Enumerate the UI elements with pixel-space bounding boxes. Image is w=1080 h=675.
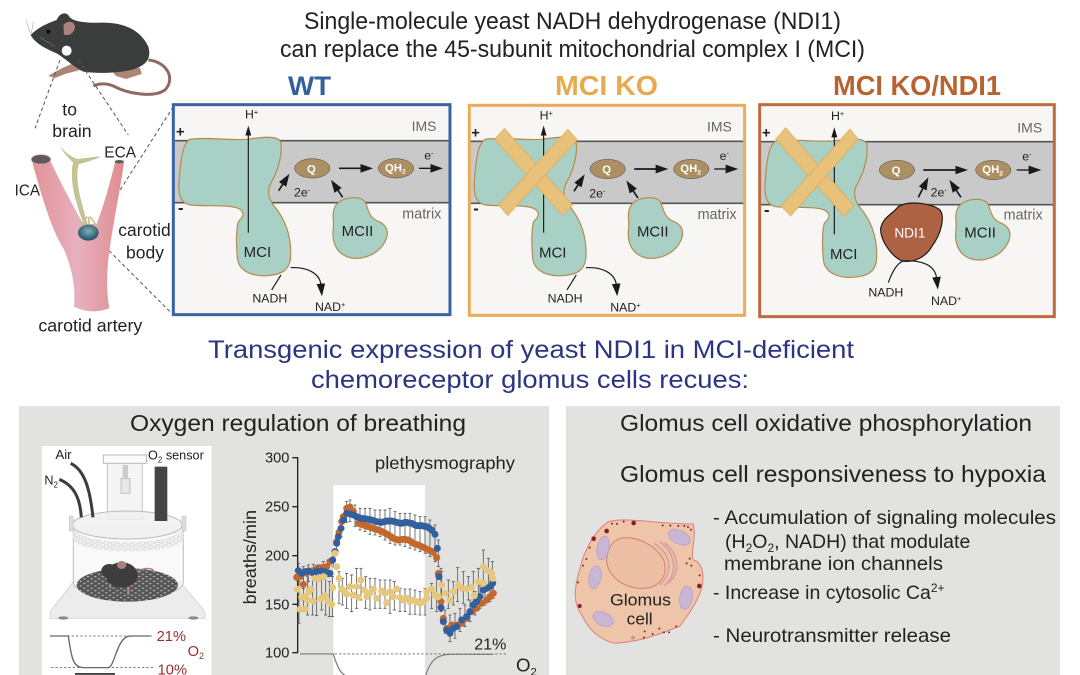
bullet list: membrane ion channels — [724, 553, 943, 575]
panel labels: NAD — [315, 300, 341, 314]
panel labels: + — [636, 300, 641, 309]
panel labels: e — [720, 149, 726, 163]
complex NDI1: NDI1 — [894, 225, 925, 240]
panel labels: 2e — [294, 186, 308, 200]
bullet list: , NADH) that modulate — [774, 531, 970, 553]
complex NDI1 — [881, 203, 942, 261]
oxygen levels: 21% — [157, 629, 186, 645]
panel labels: MCI — [830, 246, 857, 263]
apparatus labels: Air — [55, 447, 72, 462]
Q and QH2: 2 — [697, 169, 701, 176]
panel labels: + — [549, 108, 553, 117]
panel: MCI KO/NDI1 — [760, 105, 1054, 317]
cross over MCI — [495, 128, 577, 216]
anatomy labels: ICA — [15, 183, 41, 200]
anatomy labels — [15, 99, 171, 335]
icon: glomus cell: cell — [627, 609, 653, 628]
bullet list: 2 — [746, 541, 753, 555]
Q and QH2 — [295, 159, 414, 178]
panel labels: - — [764, 200, 770, 219]
chart labels: plethysmography — [375, 453, 515, 473]
apparatus labels: O — [148, 449, 158, 463]
axis: 150 — [265, 597, 289, 613]
panel labels: H — [245, 108, 254, 122]
panel labels: NAD — [610, 300, 636, 314]
oxygen levels: O — [188, 644, 199, 660]
Q and QH2: QH — [982, 164, 999, 176]
Q and QH2 — [590, 159, 709, 179]
Q and QH2: Q — [602, 164, 611, 176]
panel labels: IMS — [412, 118, 437, 134]
anatomy labels: to — [62, 99, 77, 119]
panel labels: matrix — [1004, 208, 1043, 224]
panel labels: - — [603, 186, 606, 195]
heading: WT: WT — [288, 71, 332, 101]
oxygen levels: 2 — [199, 651, 204, 661]
panel labels: NADH — [548, 292, 583, 306]
Q and QH2: 2 — [999, 170, 1003, 177]
heading: Oxygen regulation of breathing — [130, 410, 466, 436]
anatomy labels: body — [126, 242, 164, 262]
arrows — [544, 135, 727, 290]
heading: responsiveness to hypoxia: Glomus cell responsiveness to hypoxia — [620, 461, 1046, 487]
panel labels: 2e — [589, 186, 603, 200]
bullet list — [713, 507, 1056, 647]
axis: 250 — [265, 500, 289, 516]
cross over MCI — [776, 128, 858, 216]
panel labels: NADH — [252, 291, 287, 305]
illustration: mouse and carotid anatomy — [15, 13, 173, 335]
error bars — [298, 500, 493, 642]
title: Single-molecule yeast NADH dehydrogenase (NDI1) — [304, 8, 841, 35]
subtitle — [208, 336, 854, 394]
panel labels: MCII — [964, 224, 996, 241]
apparatus labels: 2 — [53, 480, 58, 489]
panel labels: + — [176, 125, 185, 141]
anatomy labels: ECA — [104, 144, 137, 161]
panel labels: + — [341, 300, 345, 309]
Q and QH2: 2 — [402, 169, 406, 176]
panel labels: - — [944, 186, 947, 195]
bullet list: 2 — [767, 541, 774, 555]
bullet list: - Accumulation of signaling molecules — [713, 507, 1056, 529]
icon: carotid artery — [31, 147, 124, 311]
axis: breaths/min — [240, 510, 260, 604]
panel labels: MCI — [539, 244, 566, 261]
icon: small mouse — [101, 561, 154, 595]
panel labels: NADH — [868, 286, 903, 300]
plethysmography apparatus — [42, 446, 212, 675]
Q and QH2: Q — [892, 165, 901, 177]
axis: 200 — [265, 549, 289, 565]
panel labels: MCII — [342, 223, 373, 240]
complex MCI — [474, 137, 586, 276]
apparatus labels: N — [44, 473, 53, 487]
panel labels: MCII — [637, 223, 669, 240]
axis: 100 — [265, 646, 289, 662]
panel labels: + — [254, 108, 258, 117]
panel labels: NAD — [931, 294, 957, 308]
anatomy labels: brain — [52, 121, 92, 141]
heading: MCI KO/NDI1: MCI KO/NDI1 — [833, 70, 1001, 101]
heading: MCI KO: MCI KO — [555, 70, 658, 101]
panel labels: matrix — [402, 206, 442, 222]
panel labels: - — [473, 199, 479, 218]
panel: glomus cell — [566, 406, 1060, 675]
icon: glomus cell — [575, 520, 703, 643]
icon: mouse — [26, 13, 170, 94]
panel labels — [176, 108, 442, 314]
oxygen levels — [157, 629, 204, 675]
bullet list: (H — [725, 531, 746, 553]
series: orange — [297, 507, 493, 628]
panel labels: - — [1029, 150, 1032, 159]
panel labels: IMS — [1017, 119, 1042, 135]
chart: breaths per minute — [240, 451, 537, 675]
Q and QH2: QH — [680, 163, 697, 175]
panel labels: H — [540, 108, 549, 122]
panel labels: - — [178, 198, 184, 217]
icon: glomus cell: Glomus — [610, 590, 671, 609]
title: can replace the 45-subunit mitochondrial complex I (MCI) — [280, 36, 865, 63]
panel labels: e — [424, 148, 431, 162]
panel: MCI KO — [469, 105, 745, 315]
subtitle: chemoreceptor glomus cells recues: — [311, 366, 749, 394]
chart labels: 21% — [474, 636, 506, 653]
panel labels: + — [471, 125, 480, 141]
oxygen trace — [50, 636, 155, 674]
complex MCI — [765, 139, 877, 277]
Q and QH2 — [879, 160, 1011, 180]
oxygen line — [300, 654, 507, 675]
bullet list: - Increase in cytosolic Ca — [713, 582, 931, 604]
complex MCII — [333, 198, 387, 258]
panel labels: + — [762, 126, 771, 142]
panel labels: - — [726, 149, 729, 158]
panel labels: 2e — [931, 186, 944, 200]
complex MCI — [179, 137, 291, 276]
chart labels — [375, 453, 537, 675]
panel labels: H — [831, 109, 840, 123]
bullet list: - Neurotransmitter release — [713, 625, 951, 647]
Q and QH2: Q — [307, 163, 316, 175]
panel labels: e — [1022, 150, 1029, 164]
panel labels: + — [957, 294, 961, 303]
panel: oxygen regulation of breathing — [19, 406, 549, 675]
anatomy labels: carotid artery — [38, 315, 143, 335]
anatomy labels: carotid — [118, 220, 171, 240]
bullet list: O — [752, 531, 767, 553]
panel labels — [762, 109, 1043, 308]
arrows — [834, 137, 1030, 283]
apparatus labels: sensor — [162, 449, 204, 463]
Q and QH2: QH — [385, 162, 402, 174]
panel labels: - — [308, 186, 311, 195]
axis: 300 — [265, 451, 289, 467]
dashed zoom lines — [35, 60, 173, 313]
panel: WT — [173, 105, 450, 315]
bullet list: 2+ — [931, 581, 945, 595]
panel labels: MCI — [244, 244, 271, 261]
complex MCII — [628, 198, 683, 258]
series: yellow — [297, 553, 493, 609]
subtitle: Transgenic expression of yeast NDI1 in MCI-deficient — [208, 336, 854, 364]
panel labels: - — [431, 148, 434, 157]
arrows — [248, 135, 432, 290]
panel labels — [471, 108, 737, 314]
apparatus labels — [44, 447, 204, 489]
axis — [240, 451, 298, 662]
complex MCII — [956, 199, 1010, 260]
panel labels: + — [840, 109, 844, 118]
title — [280, 8, 865, 63]
icon: O2 sensor — [155, 467, 167, 521]
series: blue — [298, 513, 493, 633]
icon: gas tubes — [59, 463, 93, 517]
heading: oxidative phosphorylation: Glomus cell oxidative phosphorylation — [620, 410, 1032, 436]
apparatus labels: 2 — [158, 456, 163, 465]
panel labels: IMS — [707, 119, 732, 135]
panel labels: matrix — [698, 207, 737, 223]
